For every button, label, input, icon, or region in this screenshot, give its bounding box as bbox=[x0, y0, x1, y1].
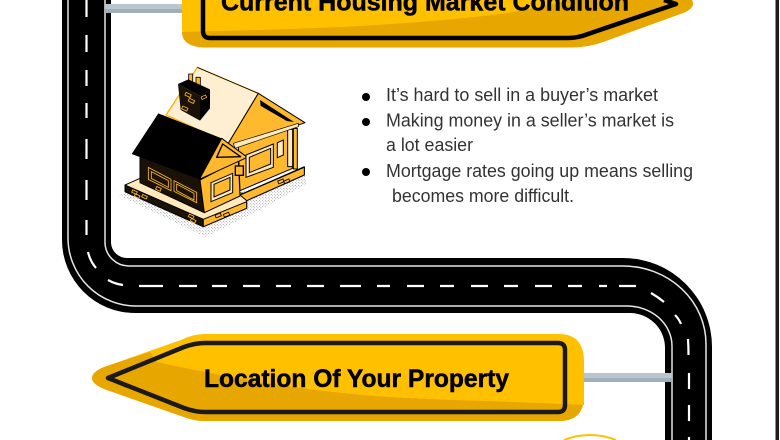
sign: location of your property bbox=[92, 334, 584, 421]
bullet: seller's market: Making money in a seller’s market is bbox=[386, 110, 674, 130]
base bricks bbox=[132, 190, 196, 223]
bullet: mortgage rates bbox=[386, 161, 693, 206]
bullet: mortgage rates: Mortgage rates going up means selling bbox=[386, 161, 693, 181]
house walls bbox=[140, 127, 297, 213]
bullet: seller's market: a lot easier bbox=[386, 135, 473, 155]
bullet: mortgage rates: becomes more difficult. bbox=[392, 186, 574, 206]
icon: isometric house bbox=[118, 67, 307, 237]
right gable bbox=[228, 93, 305, 148]
signpost pole: top sign bbox=[105, 4, 183, 13]
house base bbox=[125, 167, 304, 227]
upper roof bbox=[166, 67, 258, 143]
signpost pole: location sign bbox=[584, 373, 672, 382]
next step circle, cropped bbox=[564, 435, 616, 440]
chimney bbox=[178, 74, 210, 121]
front gable bbox=[199, 138, 247, 179]
black front roof bbox=[132, 113, 222, 179]
bullet list bbox=[362, 85, 693, 206]
dotted ground shadow bbox=[118, 175, 307, 237]
page edge rule bbox=[776, 0, 779, 440]
bullet: seller's market bbox=[386, 110, 674, 155]
sign heading: location of your property: Location Of Your Property bbox=[204, 365, 509, 393]
windows bbox=[148, 140, 283, 203]
sign: current housing market condition bbox=[182, 0, 693, 48]
bullet: buyer's market: It’s hard to sell in a buyer’s market bbox=[386, 85, 658, 105]
bullet marks bbox=[362, 93, 370, 176]
